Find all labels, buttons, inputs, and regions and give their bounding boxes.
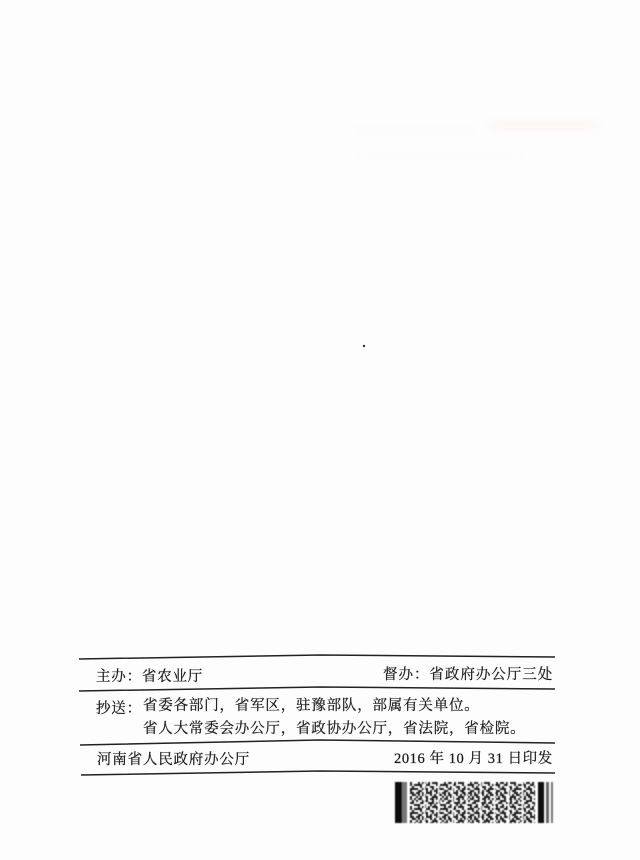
faint show-through text smear — [355, 122, 600, 158]
footer row: supervisor: 督办：省政府办公厅三处 — [383, 666, 553, 683]
footer row: copy to, first line: 抄送： — [96, 700, 142, 717]
issuing office: 河南省人民政府办公厅 — [97, 751, 250, 768]
copy recipients line 2: 省人大常委会办公厅，省政协办公厅，省法院，省检院。 — [143, 719, 526, 737]
speck — [363, 345, 365, 347]
copy recipients line 1: 省委各部门，省军区，驻豫部队，部属有关单位。 — [143, 697, 480, 714]
footer row: sponsor: 主办：省农业厅 — [96, 668, 203, 685]
barcode — [395, 782, 553, 823]
issue date: 2016 年 10 月 31 日印发 — [394, 749, 553, 767]
footer rule lines — [79, 655, 555, 775]
